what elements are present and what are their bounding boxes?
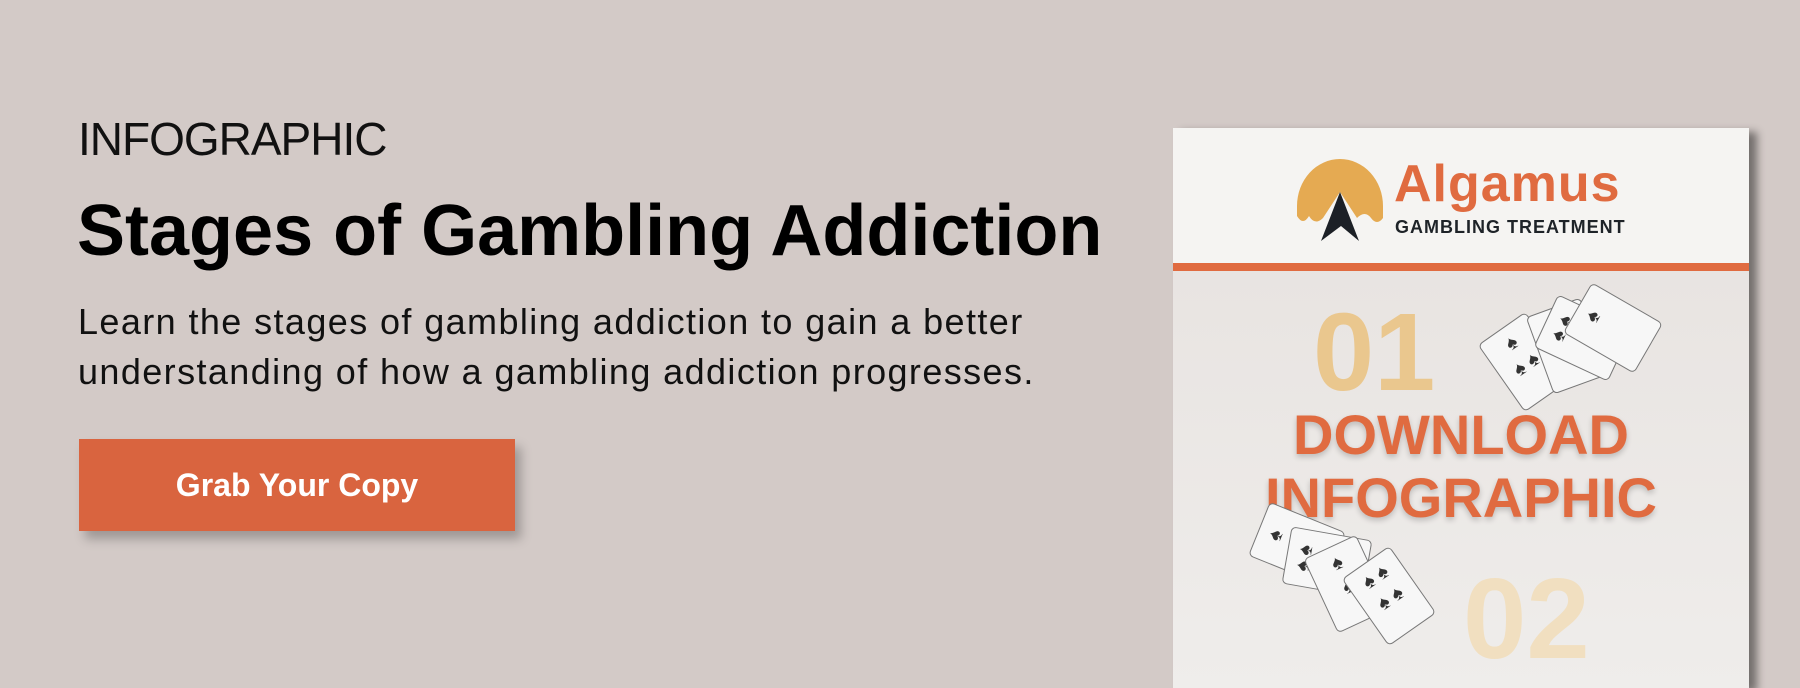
label: INFOGRAPHIC: INFOGRAPHIC [78,113,386,165]
icon: cards bottom left: ♠ [1328,551,1347,575]
logo text: Algamus: Algamus [1394,155,1621,213]
number 01: 01 [1313,291,1435,414]
icon: cards top right: ♠ [1559,337,1577,361]
icon: cards top right: ♠ [1550,312,1568,337]
subtitle text [78,301,1035,392]
icon: cards top right: ♠ ♠ [1547,311,1578,345]
panel: infographic preview card [1173,128,1749,688]
heading: DOWNLOAD INFOGRAPHIC: INFOGRAPHIC [1265,466,1657,529]
icon: cards bottom left: ♠ ♠ [1359,560,1393,594]
icon: cards top right [1480,284,1662,410]
logo subtitle: GAMBLING TREATMENT [1395,217,1626,237]
subtitle text: Learn the stages of gambling addiction to gain a better [78,301,1024,342]
icon: cards bottom left: ♠ [1339,575,1358,599]
icon: logo sun and mountain [1297,159,1383,241]
icon: cards top right: ♠ [1501,331,1522,355]
number 02: 02 [1463,556,1590,683]
icon: cards bottom left [1250,503,1434,644]
header band [1173,128,1749,263]
icon: cards top right: ♠ ♠ [1509,348,1544,381]
icon: cards top right: ♠ [1581,306,1605,327]
heading: DOWNLOAD INFOGRAPHIC [1265,403,1657,529]
icon: cards bottom left: ♠ ♠ [1373,582,1408,615]
orange divider bar [1173,263,1749,271]
button: Grab Your Copy: Grab Your Copy [176,466,418,502]
subtitle text: understanding of how a gambling addiction progresses. [78,351,1035,392]
button: Grab Your Copy [79,439,515,531]
icon: cards bottom left: ♠ [1263,526,1288,544]
icon: cards bottom left: ♠ ♠ [1291,543,1318,573]
title: Stages of Gambling Addiction [77,191,1102,271]
heading: DOWNLOAD INFOGRAPHIC: DOWNLOAD [1293,403,1629,466]
